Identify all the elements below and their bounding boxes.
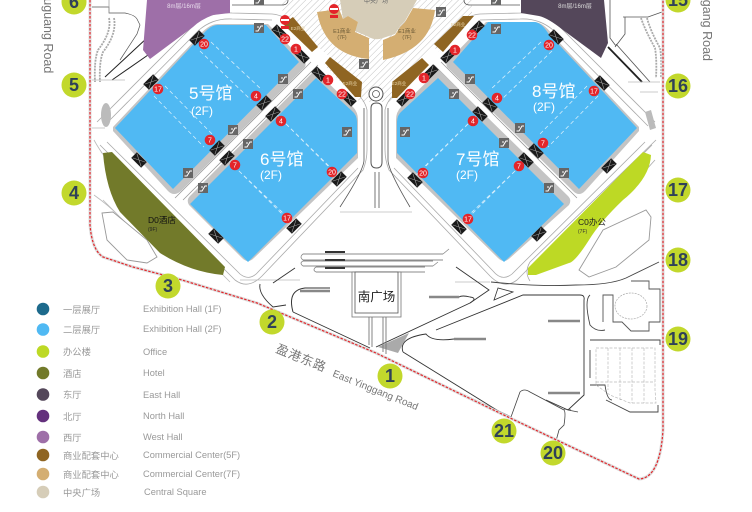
red entrance number markers: 4 xyxy=(495,96,499,102)
legend: hotel xyxy=(37,367,165,379)
hall 6: 6号馆 xyxy=(260,150,303,169)
red entrance number markers: 22 xyxy=(406,92,414,98)
legend: east hall: 东厅 xyxy=(63,389,82,400)
commercial center 5F xyxy=(283,16,474,98)
office C0: (7F) xyxy=(578,229,588,235)
legend: exhibition hall 1F xyxy=(37,303,222,315)
office C0 xyxy=(528,152,651,275)
red entrance number markers: 20 xyxy=(200,42,208,48)
cross shaped building xyxy=(603,281,660,331)
red entrance number markers: 22 xyxy=(468,32,476,40)
commercial center 5F: E2商业 xyxy=(392,80,407,87)
green gate number badges: 2 xyxy=(267,312,277,332)
legend: exhibition hall 1F: Exhibition Hall (1F) xyxy=(143,304,222,314)
red entrance number markers: 17 xyxy=(283,216,291,222)
red entrance number markers: 7 xyxy=(208,138,212,144)
south road xyxy=(257,303,511,417)
legend: office: 办公楼 xyxy=(63,346,91,357)
legend: west hall xyxy=(37,431,183,443)
legend: exhibition hall 2F: Exhibition Hall (2F) xyxy=(143,324,222,334)
hall 6: (2F) xyxy=(260,168,282,182)
legend: commercial center 7F: 商业配套中心 xyxy=(63,469,119,480)
east hall xyxy=(521,0,608,58)
hall 5: (2F) xyxy=(191,104,213,118)
green gate number badges: 4 xyxy=(69,183,79,203)
red entrance number markers: 20 xyxy=(419,170,427,178)
legend: north hall xyxy=(37,410,184,422)
green gate number badges: 18 xyxy=(668,250,688,270)
site boundary xyxy=(90,0,663,479)
red entrance number markers: 17 xyxy=(154,86,162,94)
hall 5: 5号馆 xyxy=(189,84,232,103)
road name: south Chinese: 盈港东路 xyxy=(274,341,329,375)
bottom-right loop xyxy=(579,210,651,277)
legend: east hall xyxy=(37,388,180,401)
legend: central square: 中央广场 xyxy=(63,487,100,498)
green gate number badges: 17 xyxy=(668,180,688,200)
legend: exhibition hall 2F: 二层展厅 xyxy=(63,325,100,335)
hall 8 xyxy=(446,22,639,194)
green gate number badges xyxy=(62,0,690,466)
green gate number badges: 5 xyxy=(69,75,79,95)
red entrance number markers: 22 xyxy=(281,36,289,44)
green gate number badges: 1 xyxy=(385,366,395,386)
legend: office xyxy=(37,345,167,358)
green gate number badges: 16 xyxy=(668,76,688,96)
legend: exhibition hall 2F xyxy=(37,323,222,336)
hotel D0 xyxy=(103,152,225,275)
west hall xyxy=(143,0,230,59)
legend: central square xyxy=(37,486,207,498)
hall 7 xyxy=(396,70,570,262)
red entrance number markers: 17 xyxy=(464,216,472,224)
red entrance number markers: 4 xyxy=(471,118,475,126)
legend: east hall: East Hall xyxy=(143,390,180,400)
commercial center 7F west: (7F) xyxy=(337,35,347,41)
legend: commercial center 5F: Commercial Center(5F) xyxy=(143,450,240,460)
green gate number badges: 20 xyxy=(543,443,563,463)
red entrance number markers: 7 xyxy=(233,162,237,170)
road name: south English: East Yinggang Road xyxy=(331,369,420,413)
commercial center 7F east xyxy=(383,8,435,60)
red entrance number markers xyxy=(153,30,599,224)
central driveway xyxy=(369,87,383,101)
hatched central plaza ground xyxy=(282,0,472,102)
red entrance number markers: 7 xyxy=(517,164,521,170)
subway icons xyxy=(280,4,339,29)
commercial center 7F west: E1商业 xyxy=(333,27,351,35)
train station tracks xyxy=(301,249,449,272)
commercial center 5F: E2商业 xyxy=(343,80,358,87)
red entrance number markers: 20 xyxy=(328,170,336,176)
bottom-left loop xyxy=(102,212,157,263)
red entrance number markers: 22 xyxy=(338,92,346,98)
legend: hotel: 酒店 xyxy=(63,368,82,379)
hotel D0: (9F) xyxy=(148,227,158,233)
west hall: 8m层/16m层 xyxy=(167,3,201,10)
central square xyxy=(340,0,417,39)
east hall: 8m层/16m层 xyxy=(558,3,592,10)
legend: commercial center 7F xyxy=(37,468,240,480)
south plaza box: 南广场 xyxy=(358,289,395,304)
red entrance number markers: 1 xyxy=(294,46,298,54)
legend: office: Office xyxy=(143,347,167,357)
green gate number badges: 3 xyxy=(163,276,173,296)
red entrance number markers: 1 xyxy=(422,76,426,82)
entrance doors xyxy=(131,20,617,244)
legend: central square: Central Square xyxy=(144,487,207,497)
commercial center 7F east: E1商业 xyxy=(398,27,416,35)
legend: exhibition hall 1F: 一层展厅 xyxy=(63,305,100,315)
green gate number badges: 21 xyxy=(494,421,514,441)
escalator icons xyxy=(183,0,569,193)
hall 8: (2F) xyxy=(533,100,555,114)
hall 7: 7号馆 xyxy=(456,150,499,169)
commercial center 7F west xyxy=(317,9,369,59)
hall 7: (2F) xyxy=(456,168,478,182)
red entrance number markers: 4 xyxy=(254,94,258,100)
red entrance number markers: 17 xyxy=(590,88,598,96)
hall 8: 8号馆 xyxy=(532,82,575,101)
legend: west hall: West Hall xyxy=(143,432,183,442)
red entrance number markers: 1 xyxy=(453,48,457,54)
legend: commercial center 5F xyxy=(37,449,240,461)
hall 6 xyxy=(188,70,358,262)
red entrance number markers: 1 xyxy=(326,78,330,84)
commercial center 5F: E2商业 xyxy=(291,25,306,32)
legend: west hall: 西厅 xyxy=(63,433,82,443)
hotel D0: D0酒店 xyxy=(148,215,176,225)
office C0: C0办公 xyxy=(578,217,606,227)
south plaza box xyxy=(352,272,401,354)
red entrance number markers: 7 xyxy=(541,140,545,148)
legend: north hall: North Hall xyxy=(143,411,184,421)
hall 5 xyxy=(113,24,306,194)
legend xyxy=(37,303,240,498)
legend: commercial center 7F: Commercial Center(7F) xyxy=(143,469,240,479)
legend: north hall: 北厅 xyxy=(63,412,82,422)
road network xyxy=(92,0,662,441)
commercial center 5F: E2商业 xyxy=(451,21,466,28)
legend: hotel: Hotel xyxy=(143,368,165,378)
red entrance number markers: 4 xyxy=(279,118,283,126)
commercial center 7F east: (7F) xyxy=(402,35,412,41)
green gate number badges: 19 xyxy=(668,329,688,349)
legend: commercial center 5F: 商业配套中心 xyxy=(63,450,119,461)
red entrance number markers: 20 xyxy=(545,42,553,50)
